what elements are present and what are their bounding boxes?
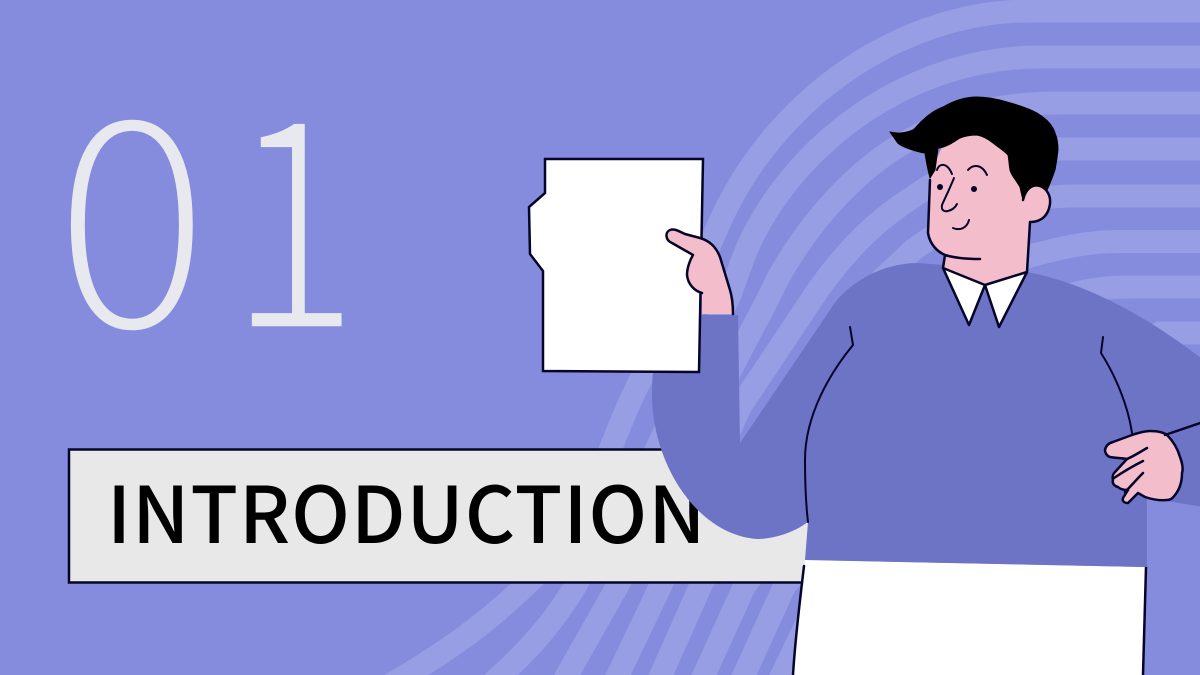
face outline bbox=[928, 180, 1050, 272]
illustration: man holding a sheet of paper bbox=[529, 97, 1200, 675]
facial features bbox=[937, 165, 987, 229]
title banner bbox=[69, 450, 829, 582]
title text: INTRODUCTION bbox=[107, 454, 706, 566]
trouser outlines bbox=[793, 566, 1146, 675]
hair bbox=[890, 97, 1058, 200]
sweater bbox=[652, 263, 1200, 567]
sweater fold lines bbox=[805, 327, 1132, 522]
white trousers bbox=[792, 560, 1147, 675]
shirt collar bbox=[943, 268, 1027, 327]
sheet of paper bbox=[529, 159, 703, 372]
right hand bbox=[1105, 423, 1200, 503]
section number: 1 bbox=[229, 0, 358, 410]
neck and face bbox=[928, 132, 1050, 285]
left hand bbox=[666, 229, 733, 314]
section number: 0 bbox=[54, 0, 210, 412]
section number bbox=[54, 0, 358, 412]
background curved stripes bbox=[390, 11, 1200, 675]
